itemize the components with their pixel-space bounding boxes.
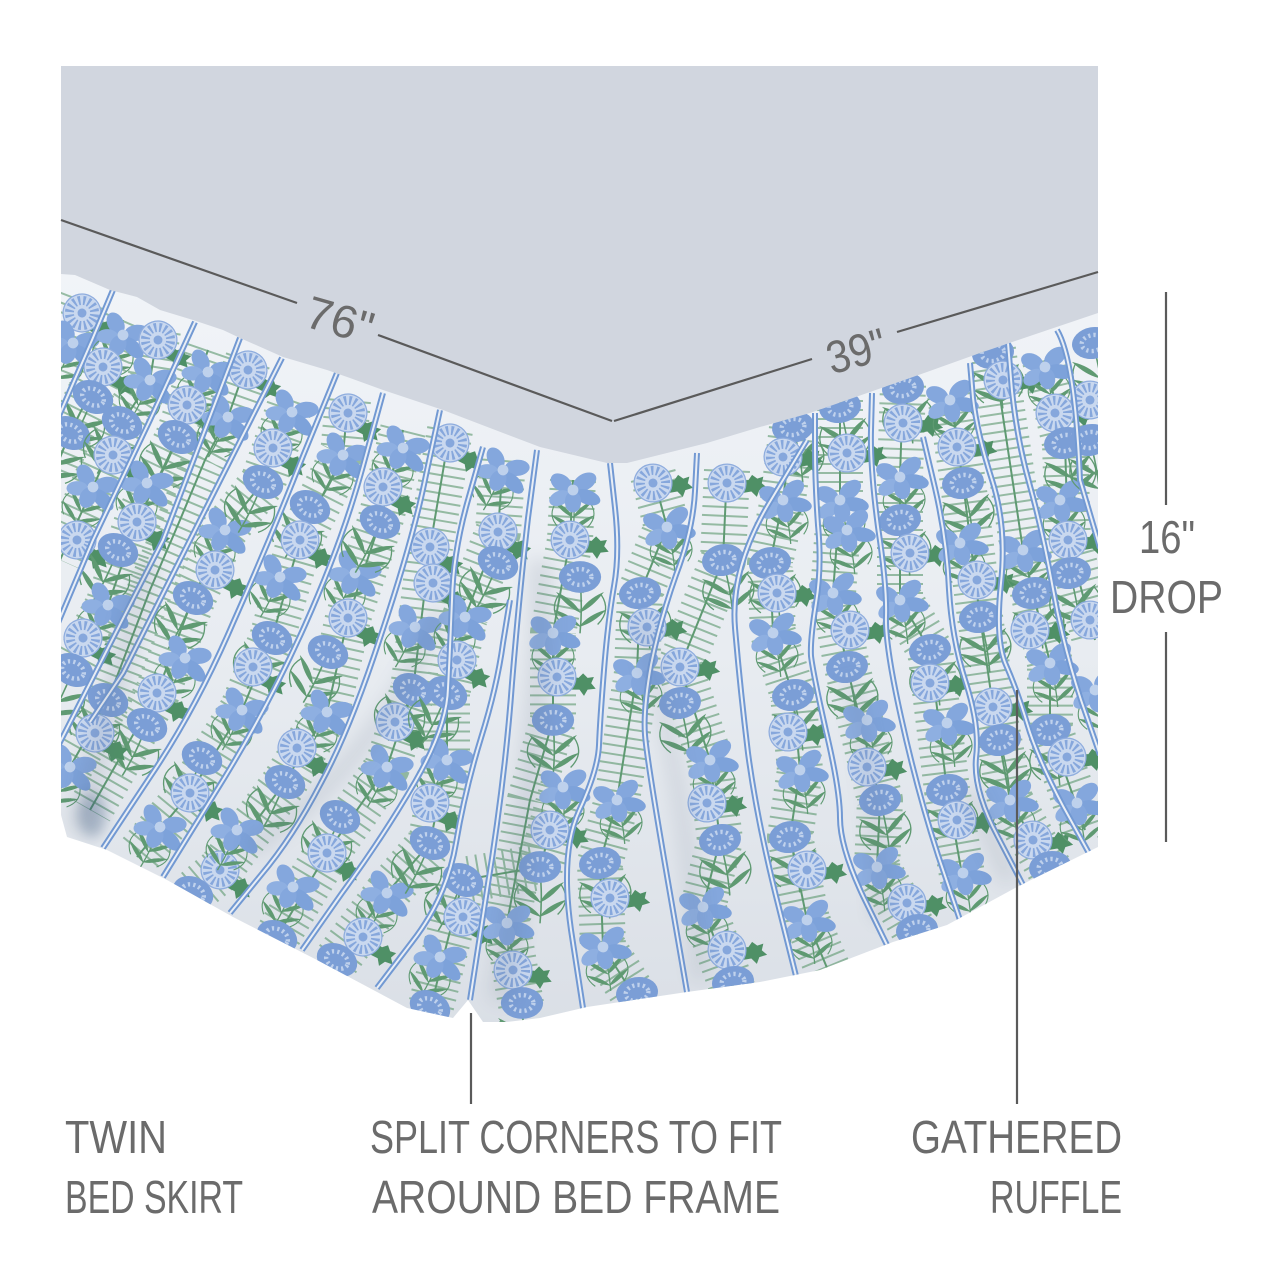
label: split corners to fit around bed frame: [370, 1111, 782, 1223]
label: gathered ruffle: RUFFLE: [990, 1171, 1122, 1223]
label: gathered ruffle: [911, 1111, 1122, 1223]
label: split corners to fit around bed frame: AROUND BED FRAME: [372, 1171, 780, 1223]
bed skirt fabric with floral stripes: [61, 274, 1098, 1022]
dimension: 76 inch length: 76": [300, 286, 380, 354]
dimension: 16 inch drop: [1110, 292, 1223, 842]
label: twin bed skirt: [65, 1111, 243, 1223]
floral blooms: right panel: [579, 327, 1098, 1002]
dimension: 16 inch drop: 16": [1139, 511, 1195, 563]
dark fold accent: [78, 793, 106, 837]
dimension: 16 inch drop: DROP: [1110, 571, 1223, 623]
floral blooms: centre fold: [390, 448, 609, 1022]
bed mattress top surface: [61, 66, 1098, 480]
dimension: 76 inch length: [61, 220, 612, 421]
label: split corners to fit around bed frame: SPLIT CORNERS TO FIT: [370, 1111, 782, 1163]
dimension: 39 inch width: [614, 272, 1098, 421]
dimension: 39 inch width: 39": [820, 318, 892, 384]
label: twin bed skirt: BED SKIRT: [65, 1171, 243, 1223]
fabric fold shading: [80, 560, 1010, 1000]
label: twin bed skirt: TWIN: [65, 1111, 167, 1163]
callout line: gathered ruffle: [1016, 690, 1018, 1104]
label: gathered ruffle: GATHERED: [911, 1111, 1122, 1163]
green vine foliage: [55, 300, 1095, 1010]
callout line: split corners: [470, 1013, 472, 1104]
pinstripes: [55, 290, 1100, 1008]
floral blooms: left panel: [61, 293, 483, 976]
